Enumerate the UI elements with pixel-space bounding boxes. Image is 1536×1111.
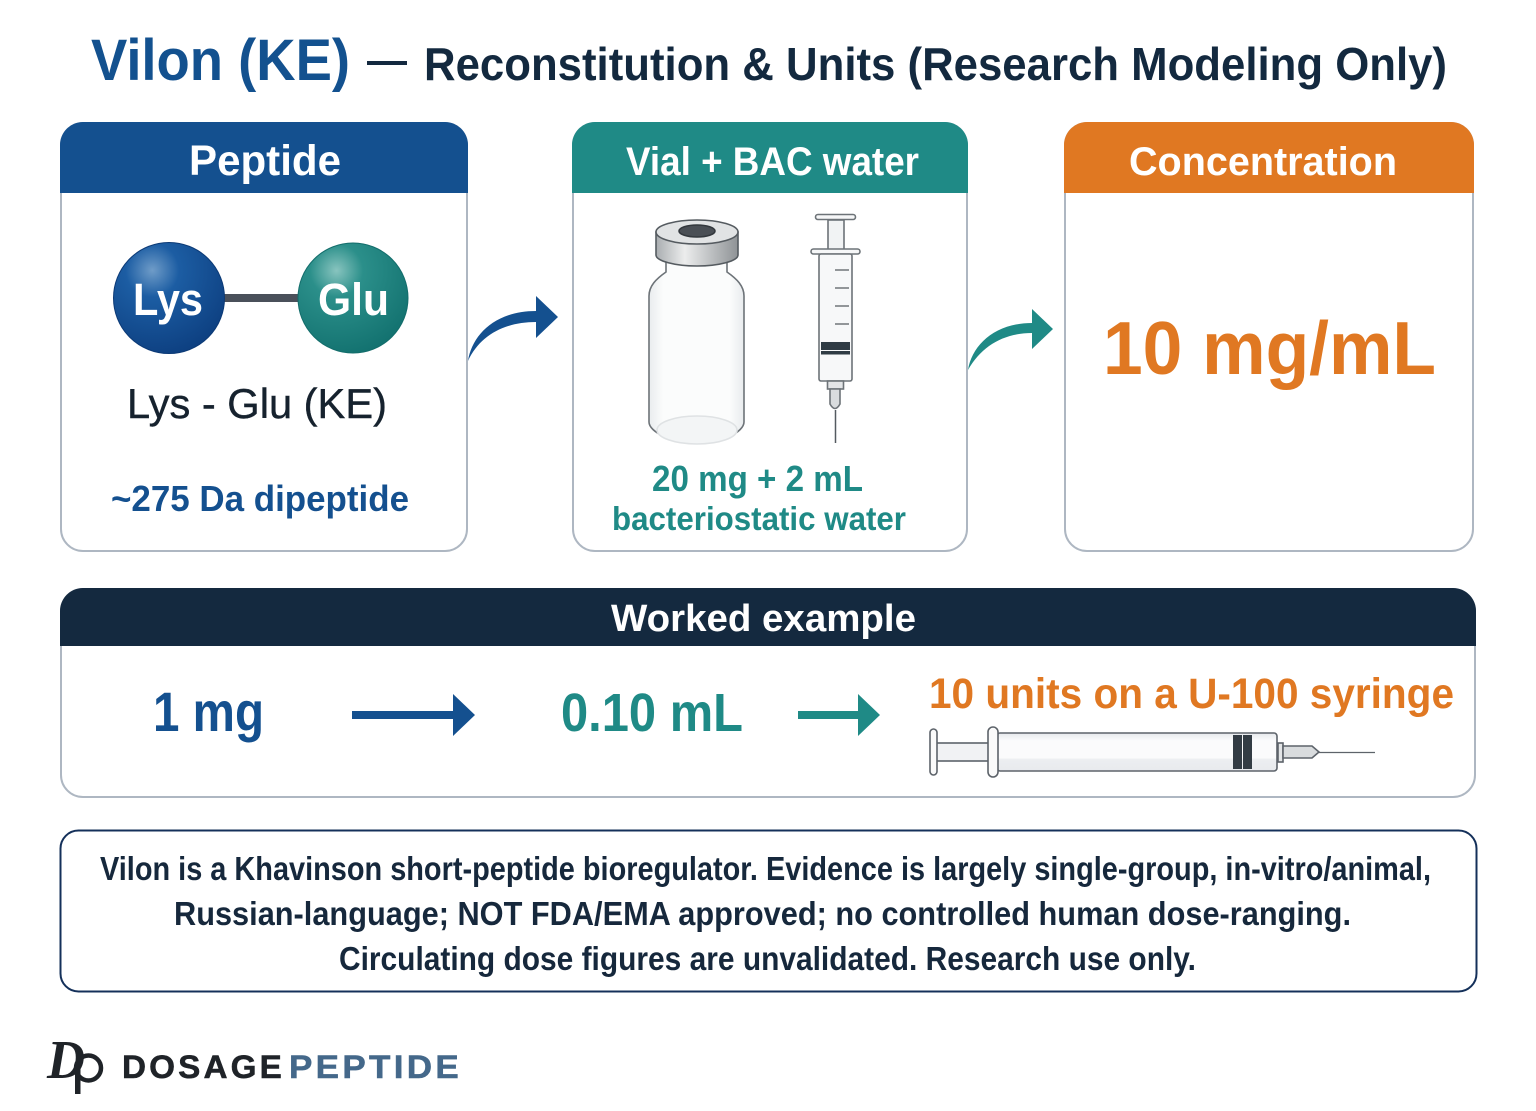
arrow: mass to volume: [352, 694, 475, 736]
title: Reconstitution & Units (Research Modeling Only): [424, 38, 1447, 90]
concentration value: 10 mg/mL: [1103, 306, 1436, 390]
title: [91, 28, 1447, 93]
note text: [100, 850, 1431, 977]
panel: vial and BAC water: bacteriostatic water: [612, 500, 906, 537]
peptide mass: ~275 Da dipeptide: [111, 478, 409, 519]
icon: syringe: [811, 214, 860, 443]
arrow: volume to units: [798, 694, 880, 736]
heading: peptide: Peptide: [189, 137, 341, 185]
logo mark: [46, 1029, 101, 1094]
icon: vial: [649, 220, 744, 444]
title: Vilon (KE): [91, 28, 350, 93]
panel: worked example: [60, 588, 1476, 797]
vial caption: 20 mg + 2 mL: [652, 458, 863, 499]
arrow: vial to concentration: [968, 309, 1053, 370]
heading: vial: Vial + BAC water: [626, 140, 919, 184]
logo: DosagePeptide: [46, 1029, 462, 1094]
icon: Lys-Glu molecule: [114, 242, 408, 354]
value: 1 mg: 1 mg: [153, 680, 264, 743]
note text: Circulating dose figures are unvalidated. Research use only.: [339, 940, 1196, 977]
wordmark: DOSAGE: [122, 1049, 285, 1085]
panel: vial and BAC water: [572, 122, 968, 551]
note text: Russian-language; NOT FDA/EMA approved; no controlled human dose-ranging.: [174, 895, 1351, 932]
icon: Lys-Glu molecule: Lys: [133, 274, 203, 325]
arrow: peptide to vial: [468, 296, 558, 361]
logo mark: D: [46, 1029, 85, 1090]
heading: worked example: Worked example: [611, 598, 916, 640]
panel: disclaimer note: [60, 830, 1476, 992]
panel: peptide: [60, 122, 468, 551]
value: 10 units: 10 units on a U-100 syringe: [929, 670, 1454, 718]
peptide name: Lys - Glu (KE): [127, 380, 387, 427]
logo: DosagePeptide: PEPTIDE: [289, 1049, 462, 1085]
panel: concentration: [1064, 122, 1474, 551]
value: 0.10 mL: 0.10 mL: [561, 683, 743, 743]
icon: Lys-Glu molecule: Glu: [318, 274, 389, 325]
heading: concentration: Concentration: [1129, 140, 1397, 184]
icon: horizontal syringe: [930, 727, 1375, 777]
